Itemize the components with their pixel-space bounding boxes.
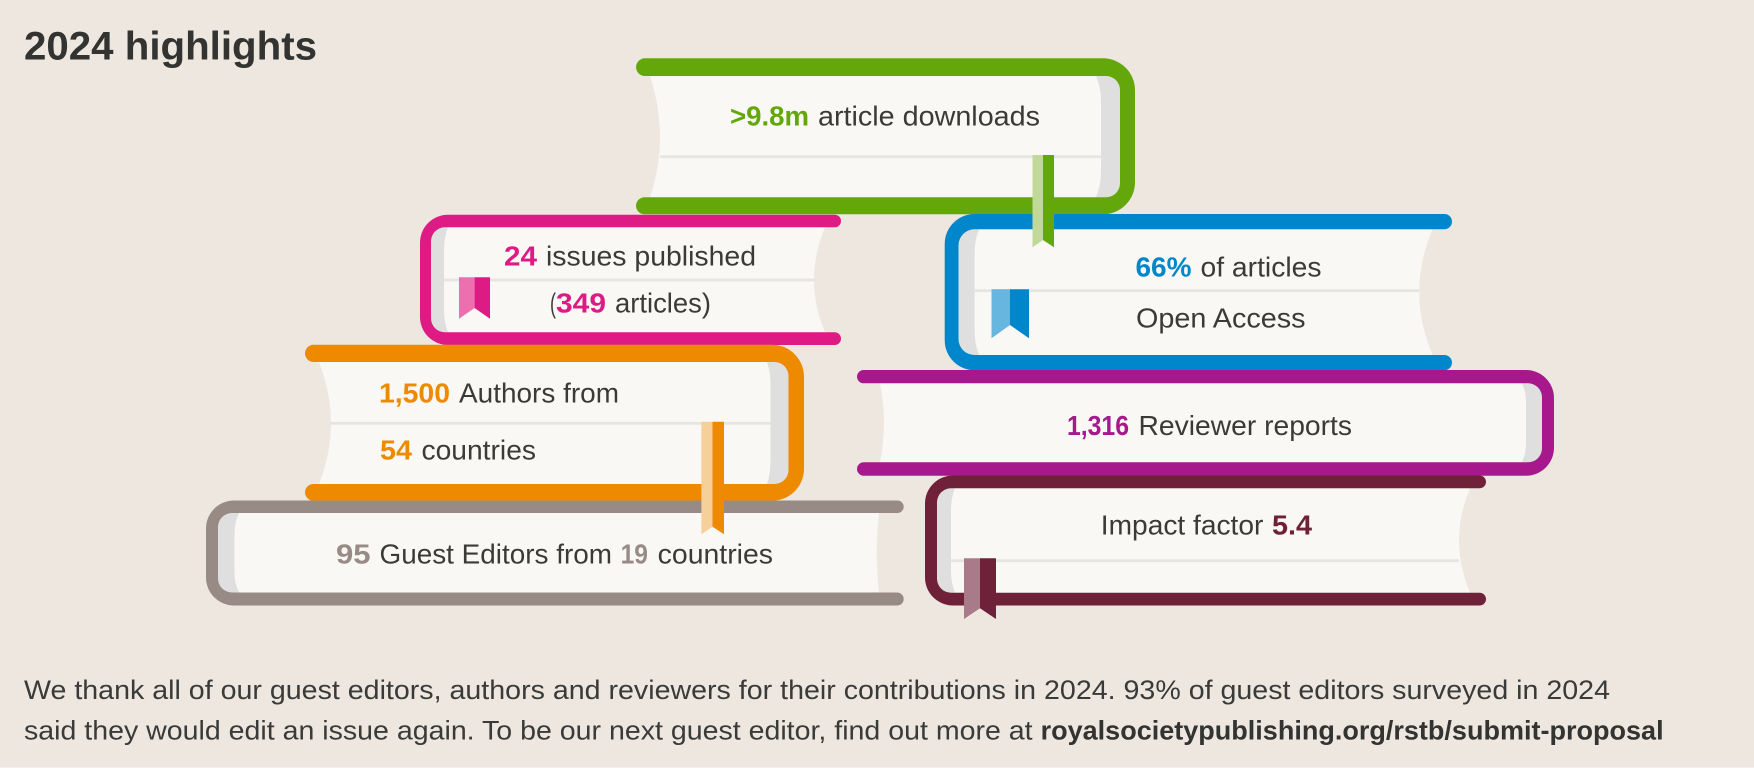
closing text: said they would edit an issue again. To be our next guest editor, find out more at [24,716,1033,746]
book: maroon, impact factor: Impact factor [1101,509,1263,540]
bookmark: green [1032,155,1054,247]
book: green, article downloads [636,58,1135,214]
book: maroon, impact factor [925,476,1486,606]
book: grey, guest editors: countries [658,538,773,569]
book: orange, authors: countries [422,434,536,465]
book: orange, authors [305,345,804,501]
book: blue, open access: of articles [1200,252,1322,283]
book: maroon, impact factor: 5.4 [1272,509,1312,540]
bookmark: maroon [964,558,996,619]
book: blue, open access: Open Access [1136,302,1306,333]
book: grey, guest editors [206,500,904,606]
book: purple, reviewer reports: 1,316 [1067,410,1129,441]
book: blue, open access [945,214,1452,370]
closing text: We thank all of our guest editors, authors and reviewers for their contributions in 2024. 93% of guest editors surveyed in 2024 [24,675,1610,705]
book: purple, reviewer reports: Reviewer reports [1138,410,1352,441]
bookmark: blue [992,289,1029,338]
book: orange, authors: 54 [380,434,412,465]
bookmark: orange [701,422,724,534]
book: orange, authors: 1,500 [379,378,450,409]
book: orange, authors: Authors from [459,378,619,409]
book: pink, issues published: articles) [615,288,711,319]
bookmark: pink [459,277,490,319]
book: grey, guest editors: Guest Editors from [380,538,612,569]
book: purple, reviewer reports [857,370,1554,476]
book: pink, issues published [420,215,841,345]
book: green, article downloads: >9.8m [730,101,809,132]
closing text [24,675,1664,746]
book: grey, guest editors: 19 [621,538,648,569]
book: pink, issues published: issues published [546,241,756,272]
book: grey, guest editors: 95 [336,538,371,569]
title: 2024 highlights [24,24,317,68]
book: green, article downloads: article downloads [818,101,1040,132]
book: pink, issues published: ( [550,288,556,319]
book: blue, open access: 66% [1136,252,1192,283]
book: pink, issues published: 24 [504,241,537,272]
book: pink, issues published: 349 [556,288,606,319]
closing text: royalsocietypublishing.org/rstb/submit-proposal [1041,716,1664,746]
